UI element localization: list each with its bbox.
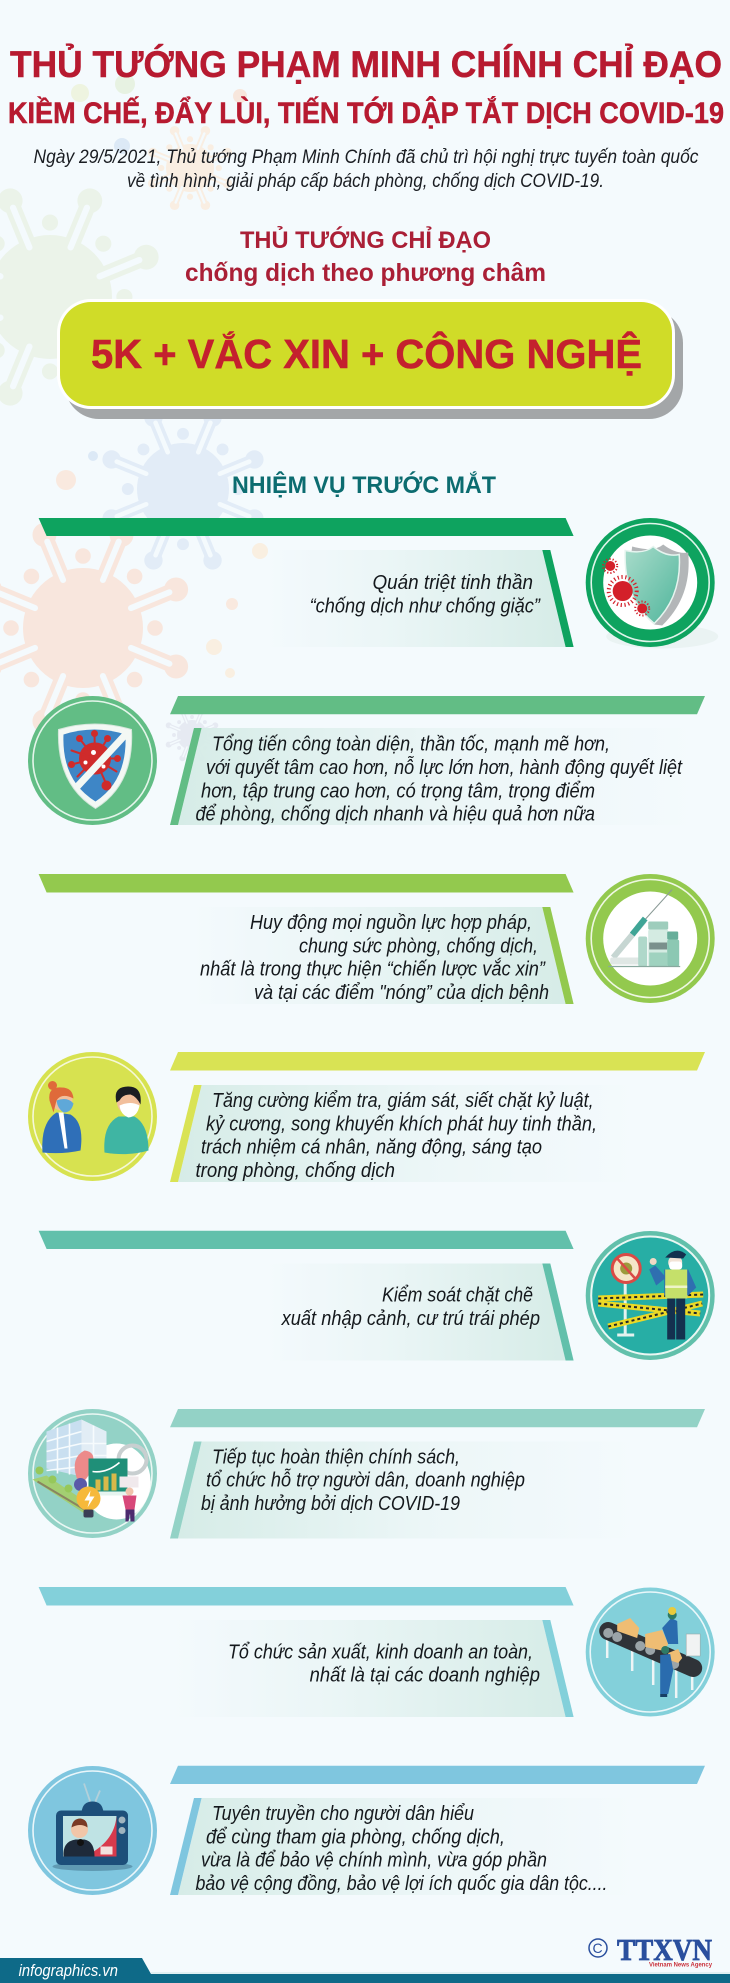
intro text: về tình hình, giải pháp cấp bách phòng, chống dịch COVID-19. (127, 170, 604, 192)
footer bar with source: infographics.vn (19, 1961, 118, 1980)
task 8 text: vừa là để bảo vệ chính mình, vừa góp phần (201, 1850, 547, 1872)
logo: TTXVN: TTXVN (617, 1932, 712, 1967)
task 4 text: Tăng cường kiểm tra, giám sát, siết chặt kỷ luật, (212, 1090, 594, 1112)
icon: shield and virus (586, 518, 718, 648)
task 4 text (196, 1090, 597, 1182)
logo: TTXVN: C (592, 1940, 603, 1956)
task 1 text: “chống dịch như chống giặc” (310, 596, 541, 618)
task 4 (28, 1052, 705, 1182)
subheading: THỦ TƯỚNG CHỈ ĐẠO (240, 225, 491, 254)
task 3 (39, 874, 715, 1004)
icon: people wearing masks (28, 1052, 157, 1181)
task 7 text: Tổ chức sản xuất, kinh doanh an toàn, (228, 1641, 533, 1663)
task 8 text: bảo vệ cộng đồng, bảo vệ lợi ích quốc gia dân tộc.... (196, 1873, 608, 1895)
task 1 text: Quán triệt tinh thần (372, 572, 533, 594)
subheading (185, 225, 546, 287)
icon: crossed virus shield (28, 696, 157, 825)
icon: production line workers (586, 1588, 715, 1716)
icon: border control officer (586, 1231, 715, 1360)
icon: building and policy chart (28, 1409, 157, 1538)
task 5 text: Kiểm soát chặt chẽ (382, 1285, 533, 1307)
task 6 text: bị ảnh hưởng bởi dịch COVID-19 (201, 1493, 460, 1515)
task 3 text: nhất là trong thực hiện “chiến lược vắc xin” (200, 958, 546, 981)
section heading: NHIỆM VỤ TRƯỚC MẮT (232, 471, 496, 499)
task 3 text: và tại các điểm "nóng” của dịch bệnh (254, 982, 549, 1004)
task 4 text: trong phòng, chống dịch (196, 1160, 395, 1182)
task 8 text: để cùng tham gia phòng, chống dịch, (206, 1826, 505, 1848)
task 7 text (228, 1641, 540, 1687)
task 2 text (196, 734, 683, 826)
task 2 text: hơn, tập trung cao hơn, có trọng tâm, trọng điểm (201, 780, 595, 802)
task 7 text: nhất là tại các doanh nghiệp (310, 1665, 540, 1687)
motto pill (57, 299, 683, 419)
task 3 text: Huy động mọi nguồn lực hợp pháp, (250, 912, 532, 934)
decorative virus pattern (0, 74, 268, 761)
task 8 (28, 1766, 705, 1895)
task 7 (39, 1587, 715, 1717)
task 6 text (201, 1446, 525, 1515)
task 2 text: Tổng tiến công toàn diện, thần tốc, mạnh mẽ hơn, (212, 734, 610, 756)
task 5 text (281, 1285, 540, 1330)
task 8 text: Tuyên truyền cho người dân hiểu (212, 1803, 474, 1825)
task 2 text: với quyết tâm cao hơn, nỗ lực lớn hơn, hành động quyết liệt (206, 756, 683, 779)
task 5 text: xuất nhập cảnh, cư trú trái phép (281, 1308, 540, 1330)
intro text (34, 146, 699, 192)
task 5 (39, 1231, 715, 1360)
task 6 text: Tiếp tục hoàn thiện chính sách, (212, 1446, 460, 1468)
logo: TTXVN: Vietnam News Agency (649, 1962, 712, 1968)
task 2 text: để phòng, chống dịch nhanh và hiệu quả hơn nữa (196, 804, 595, 826)
title (8, 43, 724, 130)
icon: syringe and vaccine vials (586, 874, 715, 1003)
task 6 text: tổ chức hỗ trợ người dân, doanh nghiệp (206, 1469, 525, 1492)
task 3 text (200, 912, 549, 1004)
task 6 (28, 1409, 705, 1538)
task 4 text: trách nhiệm cá nhân, năng động, sáng tạo (201, 1137, 542, 1159)
motto pill: 5K + VẮC XIN + CÔNG NGHỆ (91, 331, 642, 377)
task 1 text (310, 572, 541, 618)
subheading: chống dịch theo phương châm (185, 259, 546, 287)
logo: TTXVN (589, 1932, 712, 1968)
task 1 (39, 518, 718, 648)
task 2 (28, 696, 705, 826)
icon: television news reporter (28, 1766, 157, 1895)
task 3 text: chung sức phòng, chống dịch, (299, 935, 538, 957)
task 8 text (196, 1803, 608, 1895)
footer bar with source (0, 1958, 730, 1983)
task 4 text: kỷ cương, song khuyến khích phát huy tinh thần, (206, 1113, 597, 1135)
